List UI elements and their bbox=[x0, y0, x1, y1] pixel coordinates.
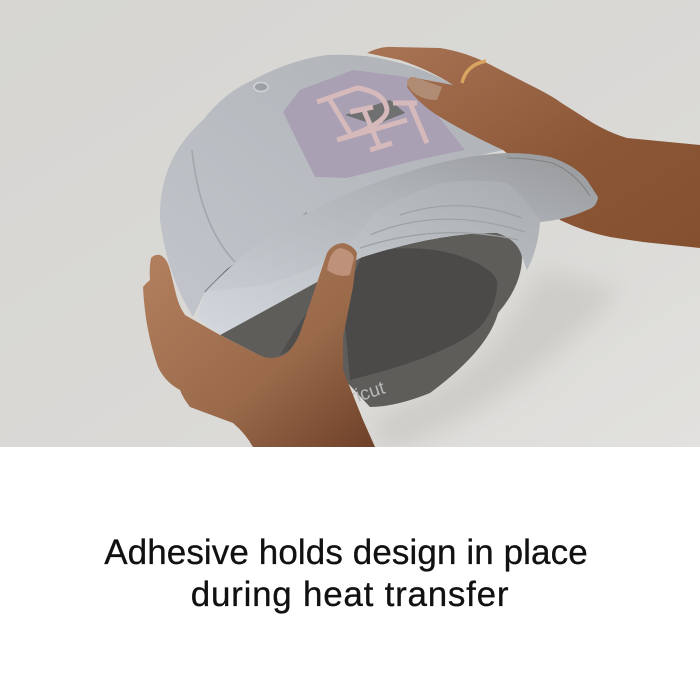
pressing form: ricut bbox=[347, 377, 388, 409]
cap brim bbox=[205, 153, 598, 292]
caption: Adhesive holds design in place bbox=[104, 533, 588, 572]
ring bbox=[462, 61, 486, 83]
left hand bbox=[143, 243, 375, 447]
cap crown bbox=[160, 55, 503, 317]
caption bbox=[104, 533, 588, 614]
thumbnail bbox=[327, 248, 354, 276]
pressing form bbox=[220, 233, 522, 409]
caption: during heat transfer bbox=[191, 575, 509, 614]
cap underband bbox=[197, 165, 540, 335]
thumbnail bbox=[407, 77, 442, 100]
photo: hands holding a cap on a pressing form bbox=[0, 0, 700, 447]
icon: eyelet bbox=[254, 82, 268, 92]
transfer design on cap bbox=[283, 70, 465, 178]
right hand bbox=[367, 47, 700, 248]
